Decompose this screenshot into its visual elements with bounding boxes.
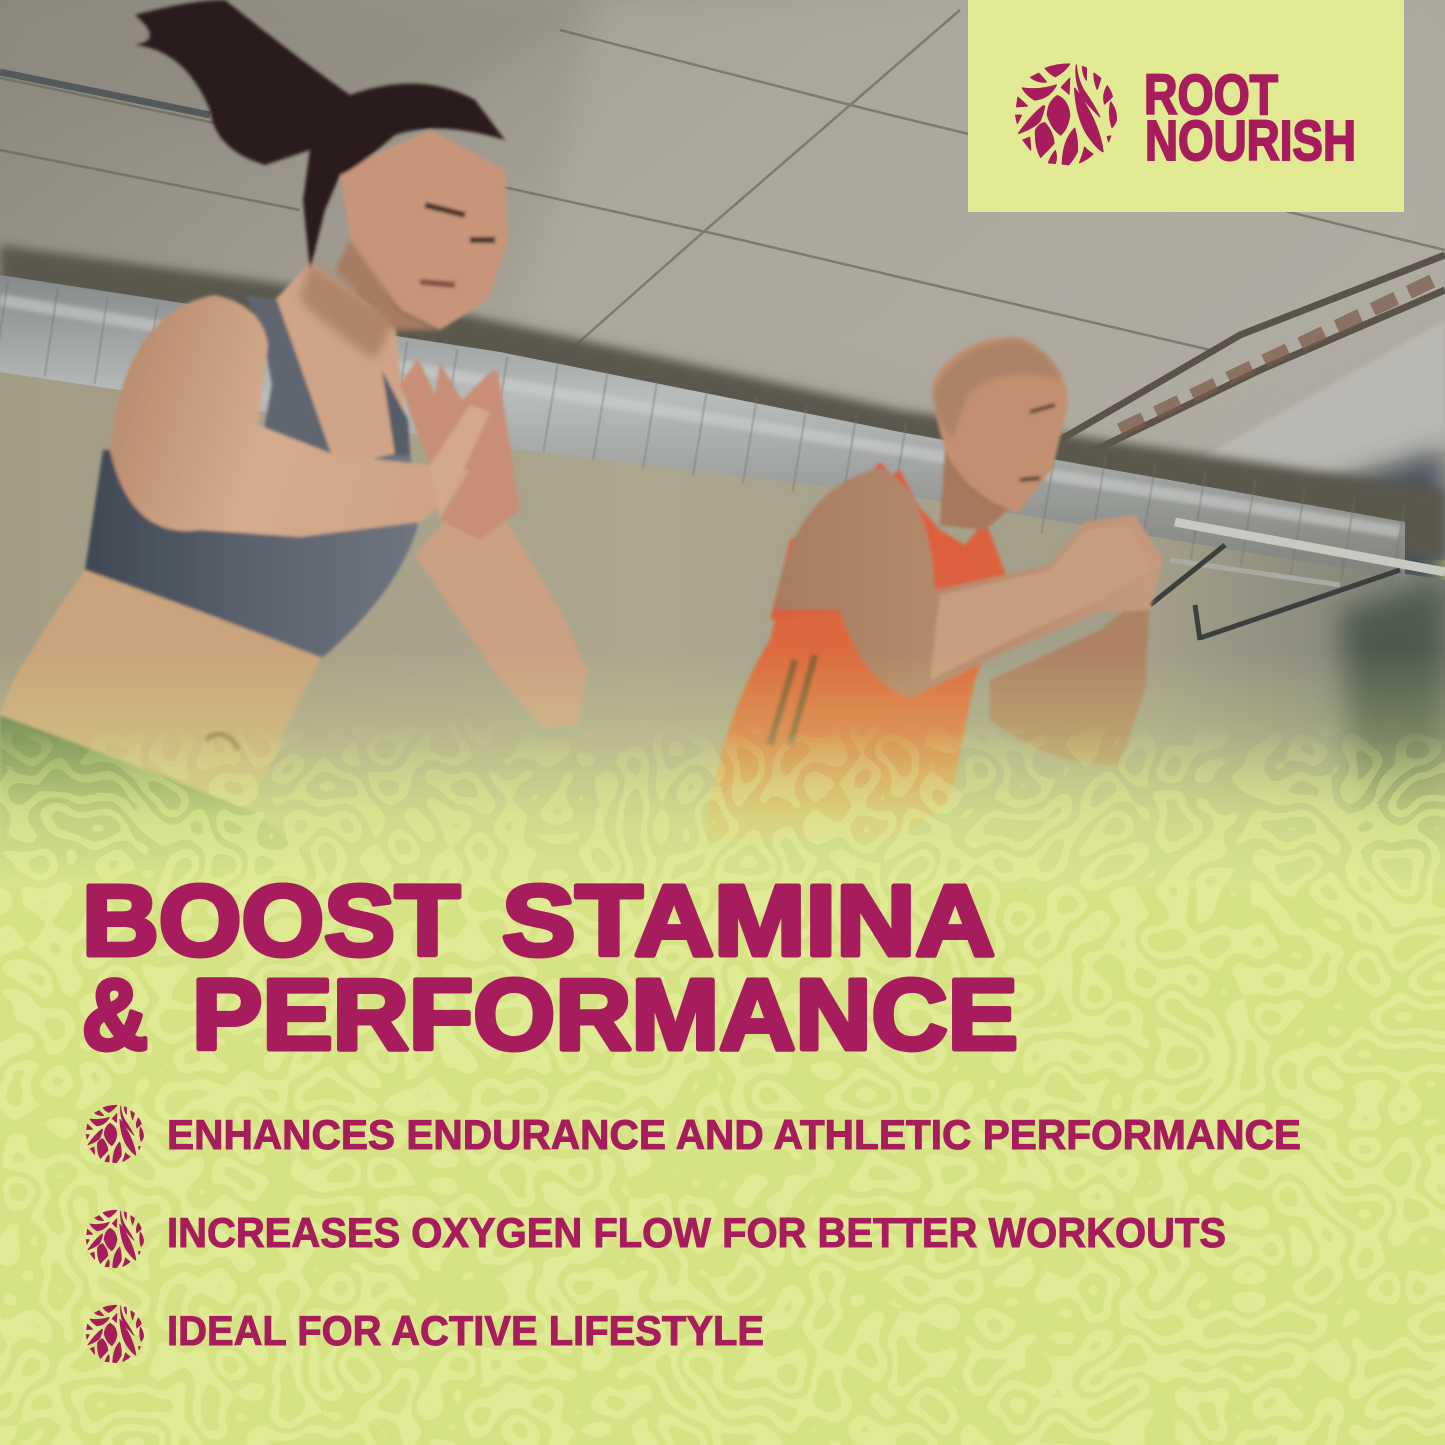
heading xyxy=(82,865,1018,1071)
logo wordmark: ROOT xyxy=(1144,63,1278,127)
woman hair and ponytail xyxy=(135,0,505,270)
woman abdomen xyxy=(0,570,330,810)
man xyxy=(705,337,1163,840)
woman xyxy=(0,0,588,880)
logo icon xyxy=(1016,64,1116,165)
heading: PERFORMANCE xyxy=(192,959,1018,1071)
bullet 2: INCREASES OXYGEN FLOW FOR BETTER WORKOUTS xyxy=(167,1209,1226,1256)
man neck and head xyxy=(940,450,1020,530)
woman straps xyxy=(245,295,332,456)
fade from photo to lime xyxy=(0,650,1445,890)
woman hands xyxy=(400,358,520,540)
logo wordmark xyxy=(1144,63,1356,173)
logo wordmark: NOURISH xyxy=(1145,109,1356,173)
woman pants xyxy=(0,715,340,880)
photo: gym scene with two athletes xyxy=(0,0,1445,900)
ceiling xyxy=(0,0,1445,600)
woman upper arm and forearm xyxy=(110,295,490,537)
heading: BOOST xyxy=(82,865,460,977)
bullet 3: IDEAL FOR ACTIVE LIFESTYLE xyxy=(167,1307,764,1354)
woman head xyxy=(340,130,508,330)
logo panel xyxy=(968,0,1404,212)
heading: STAMINA xyxy=(502,865,995,977)
wall xyxy=(0,360,1445,900)
woman forearm back xyxy=(415,510,588,728)
bullet 3 xyxy=(86,1305,764,1363)
lime base panel xyxy=(0,888,1445,1445)
man torso and tank top xyxy=(705,462,1010,840)
duct xyxy=(0,275,1405,578)
man arm back xyxy=(990,590,1150,765)
man shoulder and arm xyxy=(775,468,1163,698)
bullet 1: ENHANCES ENDURANCE AND ATHLETIC PERFORMANCE xyxy=(167,1111,1301,1158)
woman bra xyxy=(85,450,418,658)
maze pattern texture xyxy=(0,720,1445,1445)
pipes and rack right xyxy=(1150,522,1445,640)
woman chest and neck xyxy=(275,262,408,470)
shadow above duct xyxy=(0,245,1445,560)
bullet list xyxy=(86,1105,1301,1363)
heading: & xyxy=(82,959,148,1071)
